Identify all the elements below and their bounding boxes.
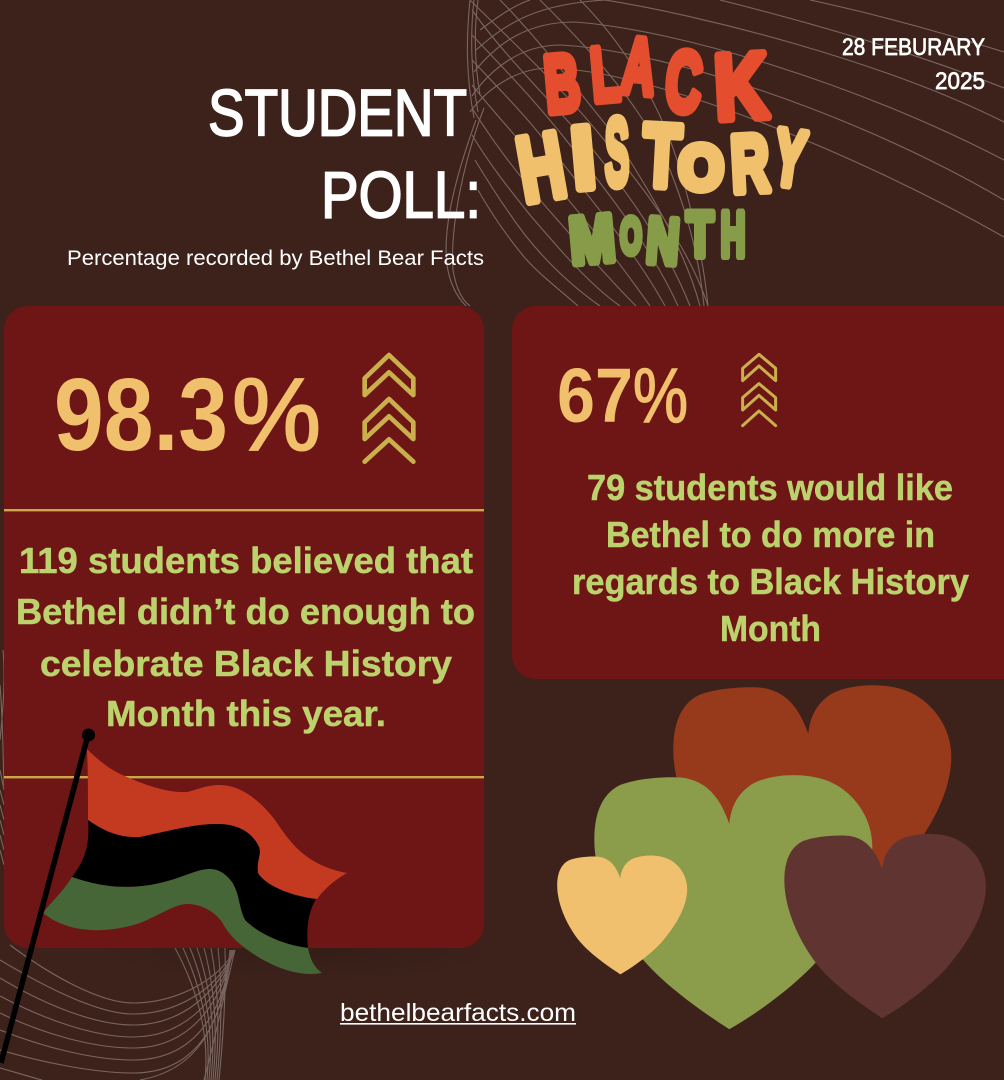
text: 119 students: celebrate Black History (40, 643, 452, 684)
title: student poll: STUDENT (208, 76, 467, 150)
logo: Black History Month lettering: R (729, 119, 771, 210)
logo: Black History Month lettering: H (510, 113, 572, 222)
heart: yellow (557, 856, 687, 974)
logo: Black History Month lettering: T (641, 106, 683, 207)
logo: Black History Month lettering: O (679, 133, 723, 203)
title: student poll: POLL: (321, 158, 481, 232)
text: 119 students (16, 540, 475, 734)
stat: 67%: 67 (557, 353, 633, 439)
text: 119 students: 119 students believed that (19, 540, 473, 581)
logo: Black History Month lettering (510, 21, 811, 278)
logo: Black History Month lettering: Y (769, 112, 811, 204)
stat: 98.3%: % (232, 357, 321, 472)
logo: Black History Month lettering: L (588, 32, 623, 118)
icon: small triple chevrons (743, 354, 776, 426)
text: 119 students: Bethel didn’t do enough to (16, 591, 475, 632)
panel: 67 percent statistic (512, 306, 1004, 679)
icon: triple chevrons (365, 355, 413, 462)
text: 79 students: regards to Black History (572, 561, 969, 602)
date: 2025 (935, 68, 985, 95)
title: student poll (208, 76, 481, 232)
panel: 98.3 percent statistic (4, 306, 484, 948)
logo: Black History Month lettering: B (541, 37, 583, 129)
logo: Black History Month lettering: N (644, 204, 682, 278)
text: 79 students: Month (720, 608, 821, 649)
logo: Black History Month lettering: C (662, 33, 706, 131)
text: 119 students: Month this year. (106, 693, 386, 734)
date: 28 FEBURARY (842, 34, 985, 61)
logo: Black History Month lettering: S (605, 99, 629, 206)
heart: brown (673, 685, 951, 939)
logo: Black History Month lettering: A (619, 21, 659, 111)
logo: Black History Month lettering: T (687, 199, 713, 270)
footer link: bethelbearfacts.com (340, 999, 576, 1027)
stat: 98.3%: 98.3 (54, 357, 228, 472)
text: 79 students: 79 students would like (587, 467, 953, 508)
logo: Black History Month lettering: I (567, 108, 599, 208)
text: 79 students (572, 467, 969, 649)
heart: maroon (784, 834, 986, 1018)
stat: 67%: % (633, 353, 688, 439)
stat: 67% (557, 353, 688, 439)
logo: Black History Month lettering: O (620, 207, 642, 264)
illustration: hearts (557, 685, 986, 1029)
logo: Black History Month lettering: K (712, 34, 770, 139)
subtitle: Percentage recorded by Bethel Bear Facts (67, 247, 484, 270)
heart: green (594, 775, 872, 1029)
date (842, 34, 985, 95)
logo: Black History Month lettering: M (566, 200, 618, 278)
icon: pan-African flag (1, 728, 347, 1063)
logo: Black History Month lettering: H (721, 199, 745, 270)
text: 79 students: Bethel to do more in (606, 514, 935, 555)
